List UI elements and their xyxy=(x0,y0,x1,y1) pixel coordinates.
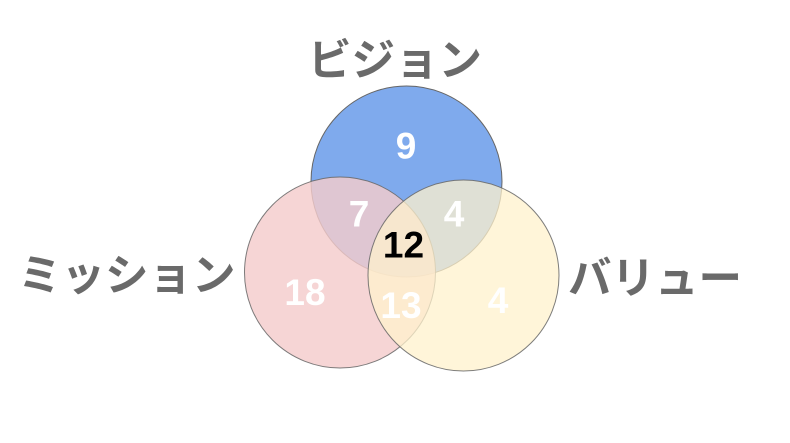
number: mission only: 18 xyxy=(284,272,326,313)
circle: mission xyxy=(244,177,436,368)
circle: value xyxy=(368,180,559,371)
number: mission and value: 13 xyxy=(380,285,422,326)
heading: mission: ミッション xyxy=(18,252,236,300)
heading: vision: ビジョン xyxy=(308,38,482,86)
number: vision only: 9 xyxy=(396,126,416,166)
circle: vision xyxy=(311,86,502,277)
number: value only: 4 xyxy=(488,280,509,321)
heading: value: バリュー xyxy=(568,256,742,304)
number: vision and value: 4 xyxy=(444,194,465,234)
number: vision and mission: 7 xyxy=(349,194,369,234)
number: all three: 12 xyxy=(383,224,424,266)
